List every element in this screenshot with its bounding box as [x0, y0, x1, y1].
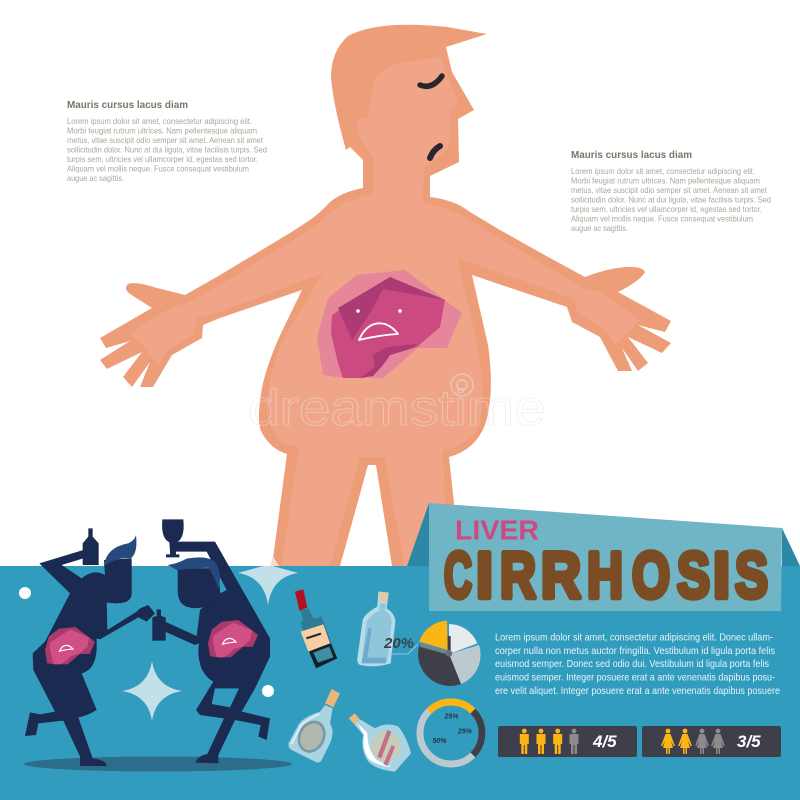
wine bottle: [295, 589, 337, 668]
title: cirrhosis: [444, 538, 768, 612]
left text block: Aliquam vel mollis neque. Fusce consequat vestibulum: [67, 164, 249, 174]
right text block: Morbi feugiat rutrum ultrices. Nam pellentesque aliquam: [571, 176, 760, 186]
green-label bottle: [288, 689, 340, 763]
right text block: turpis sem, ultricies vel ullamcorper id, egestas sed tortor.: [571, 204, 762, 214]
sparkle star large: [122, 661, 182, 721]
small liver left figure: [45, 627, 95, 664]
title: cirrhosis: R: [541, 538, 581, 612]
clear tall bottle: [357, 592, 395, 666]
sparkle star upper: [238, 566, 298, 605]
title: cirrhosis: I: [713, 538, 730, 612]
right text block: augue ac sagittis.: [571, 223, 628, 233]
title: cirrhosis: S: [677, 538, 710, 612]
title: cirrhosis: O: [632, 538, 670, 612]
eye: [420, 76, 442, 86]
donut chart: 25%: [444, 714, 459, 720]
title: cirrhosis: R: [500, 538, 536, 612]
beer bottle: [152, 609, 166, 641]
donut chart: 25%: [457, 728, 473, 736]
connector line: [390, 644, 418, 654]
message bottle: [349, 713, 411, 772]
left text block: Mauris cursus lacus diam: [67, 99, 188, 111]
title: cirrhosis: C: [444, 538, 472, 612]
donut chart: 50%: [432, 738, 447, 745]
blue lower panel: [0, 566, 800, 800]
title: cirrhosis: S: [735, 538, 768, 612]
stat bar: men 4/5: 4/5: [592, 732, 617, 751]
right text block: Aliquam vel mollis neque. Fusce consequat vestibulum: [571, 214, 753, 224]
pie chart with 20 percent label: [383, 621, 481, 686]
bottles group: [288, 589, 411, 772]
pale star tip on leg: [270, 556, 279, 566]
right text block: [571, 149, 771, 233]
left text block: Morbi feugiat rutrum ultrices. Nam pellentesque aliquam: [67, 126, 257, 136]
body paragraph: [495, 632, 780, 697]
left text block: Lorem ipsum dolor sit amet, consectetur adipiscing elit.: [67, 116, 252, 126]
right text block: metus, vitae suscipit odio semper sit amet. Aenean sit amet: [571, 185, 768, 195]
liver with sad face: [317, 270, 462, 378]
body paragraph: euismod semper. Donec sed odio dui. Vestibulum id ligula porta felis: [495, 659, 769, 670]
right figure: [152, 519, 270, 763]
small liver right figure: [208, 620, 258, 657]
stat bar: men 4/5: [498, 726, 637, 757]
wine glass: [162, 519, 184, 557]
right text block: sollicitudin dolor. Nunc at dui ligula, vitae facilisis turpis. Sed: [571, 194, 771, 204]
title: cirrhosis: H: [587, 538, 623, 612]
white dot left: [19, 587, 31, 599]
20 percent label: 20%: [383, 635, 414, 652]
donut chart: [420, 702, 482, 764]
ground shadow: [24, 756, 292, 772]
left text block: sollicitudin dolor. Nunc at dui ligula, vitae facilisis turpis. Sed: [67, 144, 267, 154]
left text block: augue ac sagittis.: [67, 173, 124, 183]
left figure: [25, 528, 155, 766]
stat bar: women 3/5: 3/5: [737, 732, 761, 751]
title banner: [407, 503, 800, 612]
stat bar: women 3/5: [642, 726, 781, 757]
left text block: turpis sem, ultricies vel ullamcorper id, egestas sed tortor.: [67, 154, 258, 164]
mouth: [430, 146, 440, 158]
body paragraph: Lorem ipsum dolor sit amet, consectetur adipiscing elit. Donec ullam-: [495, 632, 773, 644]
drinking figures: [25, 519, 270, 766]
watermark: dreamstime: [248, 380, 546, 436]
title: liver: LIVER: [455, 514, 539, 546]
left text block: metus, vitae suscipit odio semper sit amet. Aenean sit amet: [67, 135, 264, 145]
white dot right: [262, 685, 274, 697]
left text block: [67, 99, 267, 183]
right text block: Lorem ipsum dolor sit amet, consectetur adipiscing elit.: [571, 166, 755, 176]
right text block: Mauris cursus lacus diam: [571, 149, 692, 161]
body paragraph: corper nulla non metus auctor fringilla. Vestibulum id ligula porta felis: [495, 646, 775, 657]
human body figure: [100, 25, 671, 566]
title: cirrhosis: I: [476, 538, 493, 612]
